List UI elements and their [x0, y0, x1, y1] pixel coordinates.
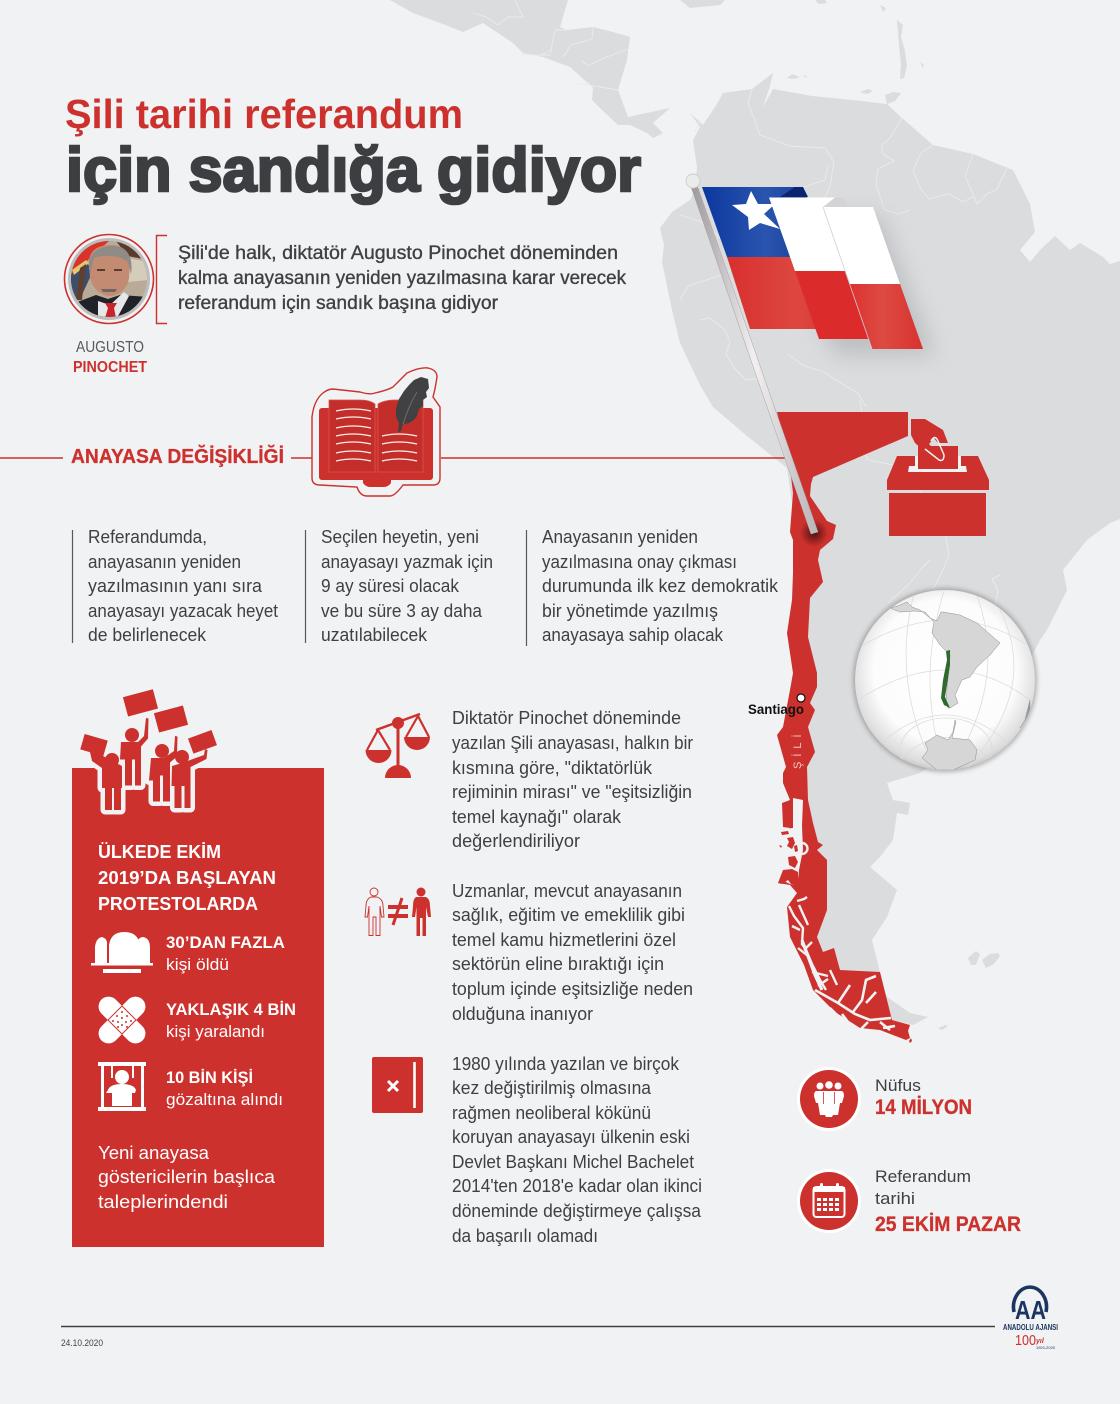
- Chile label: ŞİLİ: [791, 729, 804, 769]
- portrait: Augusto Pinochet: [64, 234, 154, 324]
- column 2 text: uzatılabilecek: [321, 624, 428, 645]
- column 1 text: yazılmasının yanı sıra: [88, 575, 263, 596]
- text: constitution legacy: değerlendiriliyor: [452, 830, 580, 851]
- Chilean flag: [702, 187, 923, 349]
- column 1 text: anayasayı yazacak heyet: [88, 600, 278, 621]
- column 2 text: anayasayı yazmak için: [321, 551, 493, 572]
- panel heading: ÜLKEDE EKİM: [98, 842, 221, 862]
- column 1 text: anayasanın yeniden: [88, 551, 241, 572]
- title: Şili tarihi referandum: [65, 91, 463, 137]
- column 3 text: yazılmasına onay çıkması: [542, 551, 737, 572]
- text: inequality: sektörün eline bıraktığı için: [452, 953, 664, 974]
- logo: Anadolu Ajansi: yıl: [1035, 1338, 1045, 1345]
- icon: gravestones: [91, 932, 153, 973]
- text: inequality: sağlık, eğitim ve emeklilik gibi: [452, 904, 685, 925]
- stat: population: [875, 1076, 972, 1119]
- panel closing text: Yeni anayasa: [98, 1142, 210, 1163]
- text: inequality: [452, 880, 693, 1024]
- column 2 text: Seçilen heyetin, yeni: [321, 526, 479, 547]
- stat: injured: YAKLAŞIK 4 BİN: [166, 1000, 296, 1019]
- stat: detained: [166, 1068, 283, 1109]
- text: reform attempts: da başarılı olamadı: [452, 1225, 598, 1246]
- panel: protests: [72, 689, 324, 1247]
- stat: population: Nüfus: [875, 1076, 921, 1095]
- logo: Anadolu Ajansi: 100: [1015, 1332, 1036, 1349]
- flag shadow: [770, 215, 935, 355]
- icon: bandage: [94, 992, 150, 1048]
- stat: referendum date: 25 EKİM PAZAR: [875, 1213, 1021, 1236]
- column 3 text: [526, 526, 779, 646]
- text: reform attempts: Devlet Başkanı Michel Bachelet: [452, 1151, 694, 1172]
- map: country borders: [473, 0, 1009, 618]
- column 3 text: anayasaya sahip olacak: [542, 624, 724, 645]
- text: inequality: toplum içinde eşitsizliğe neden: [452, 978, 693, 999]
- stat: referendum date: tarihi: [875, 1189, 915, 1208]
- text: reform attempts: kez değiştirilmiş olmasına: [452, 1077, 652, 1098]
- section heading: ANAYASA DEĞİŞİKLİĞİ: [71, 444, 284, 468]
- panel closing text: [98, 1142, 276, 1212]
- column 1 text: de belirlenecek: [88, 624, 207, 645]
- text: constitution legacy: [452, 707, 693, 851]
- text: reform attempts: rağmen neoliberal kökünü: [452, 1102, 651, 1123]
- title: için sandığa gidiyor: [66, 136, 641, 205]
- stat: injured: [166, 1000, 296, 1041]
- portrait name: AUGUSTO: [76, 339, 144, 356]
- logo: Anadolu Ajansi: 1920-2020: [1036, 1346, 1055, 1350]
- section rule: [0, 457, 790, 459]
- intro text: kalma anayasanın yeniden yazılmasına karar verecek: [178, 268, 626, 289]
- stat: deaths: 30’DAN FAZLA: [166, 933, 285, 952]
- map: Chile in red: [772, 412, 912, 1043]
- icon: population: [797, 1067, 861, 1131]
- stat: deaths: [166, 933, 285, 974]
- column 2 text: 9 ay süresi olacak: [321, 575, 460, 596]
- text: constitution legacy: rejiminin mirası" ve "eşitsizliğin: [452, 781, 692, 802]
- icon: closed constitution book: [372, 1057, 423, 1113]
- text: reform attempts: 1980 yılında yazılan ve birçok: [452, 1053, 680, 1074]
- text: constitution legacy: yazılan Şili anayasası, halkın bir: [452, 732, 693, 753]
- intro text: [178, 243, 626, 314]
- date: 24.10.2020: [61, 1338, 103, 1348]
- column 2 text: [306, 526, 493, 645]
- panel heading: 2019’DA BAŞLAYAN: [98, 868, 276, 888]
- text: inequality: olduğuna inanıyor: [452, 1003, 593, 1024]
- bracket: [156, 236, 167, 324]
- text: inequality: temel kamu hizmetlerini özel: [452, 929, 676, 950]
- column 3 text: Anayasanın yeniden: [542, 526, 698, 547]
- portrait name: PINOCHET: [73, 359, 147, 376]
- protesters icon halo: [80, 689, 217, 810]
- Santiago label: Santiago: [748, 702, 804, 717]
- column 1 text: Referandumda,: [88, 526, 207, 547]
- panel closing text: taleplerindendi: [98, 1191, 228, 1212]
- stat: deaths: kişi öldü: [166, 956, 229, 974]
- footer rule: [61, 1326, 995, 1328]
- logo: Anadolu Ajansi: ANADOLU AJANSI: [1003, 1322, 1058, 1332]
- panel heading: [98, 842, 276, 914]
- intro text: referandum için sandık başına gidiyor: [178, 293, 499, 314]
- inset globe: [853, 588, 1037, 782]
- text: reform attempts: döneminde değiştirmeye çalışsa: [452, 1200, 702, 1221]
- portrait name: [73, 339, 147, 376]
- flagpole: [686, 174, 818, 534]
- icon: ballot box and hand: [887, 419, 989, 536]
- text: constitution legacy: temel kaynağı" olarak: [452, 806, 622, 827]
- icon: person behind bars: [98, 1062, 146, 1111]
- icon: calendar: [797, 1169, 861, 1233]
- text: inequality: Uzmanlar, mevcut anayasanın: [452, 880, 682, 901]
- text: reform attempts: koruyan anayasayı ülkenin eski: [452, 1126, 690, 1147]
- stat: population: 14 MİLYON: [875, 1096, 972, 1119]
- stat: detained: 10 BİN KİŞİ: [166, 1068, 253, 1087]
- intro text: Şili'de halk, diktatör Augusto Pinochet döneminden: [178, 243, 618, 264]
- icon: inequality: [365, 888, 431, 936]
- stat: referendum date: Referandum: [875, 1167, 971, 1186]
- icon: scales: [366, 714, 430, 778]
- text: reform attempts: 2014'ten 2018'e kadar olan ikinci: [452, 1175, 702, 1196]
- column 2 text: ve bu süre 3 ay daha: [321, 600, 483, 621]
- title: [65, 91, 641, 205]
- logo: Anadolu Ajansi: AA: [1015, 1295, 1046, 1325]
- panel closing text: göstericilerin başlıca: [98, 1166, 276, 1187]
- panel heading: PROTESTOLARDA: [98, 894, 258, 914]
- logo: Anadolu Ajansi: [1003, 1287, 1058, 1350]
- text: reform attempts: [452, 1053, 702, 1246]
- column 3 text: durumunda ilk kez demokratik: [542, 575, 779, 596]
- Santiago label: [748, 694, 805, 717]
- map: Central and South America: [390, 0, 1120, 1030]
- icon: open book and feather: [312, 368, 440, 496]
- protesters icon: [80, 689, 217, 810]
- column 3 text: bir yönetimde yazılmış: [542, 600, 718, 621]
- stat: detained: gözaltına alındı: [166, 1091, 283, 1109]
- stat: injured: kişi yaralandı: [166, 1023, 265, 1041]
- stat: referendum date: [875, 1167, 1021, 1236]
- text: constitution legacy: Diktatör Pinochet döneminde: [452, 707, 681, 728]
- column 1 text: [72, 526, 278, 645]
- text: constitution legacy: kısmına göre, "diktatörlük: [452, 757, 653, 778]
